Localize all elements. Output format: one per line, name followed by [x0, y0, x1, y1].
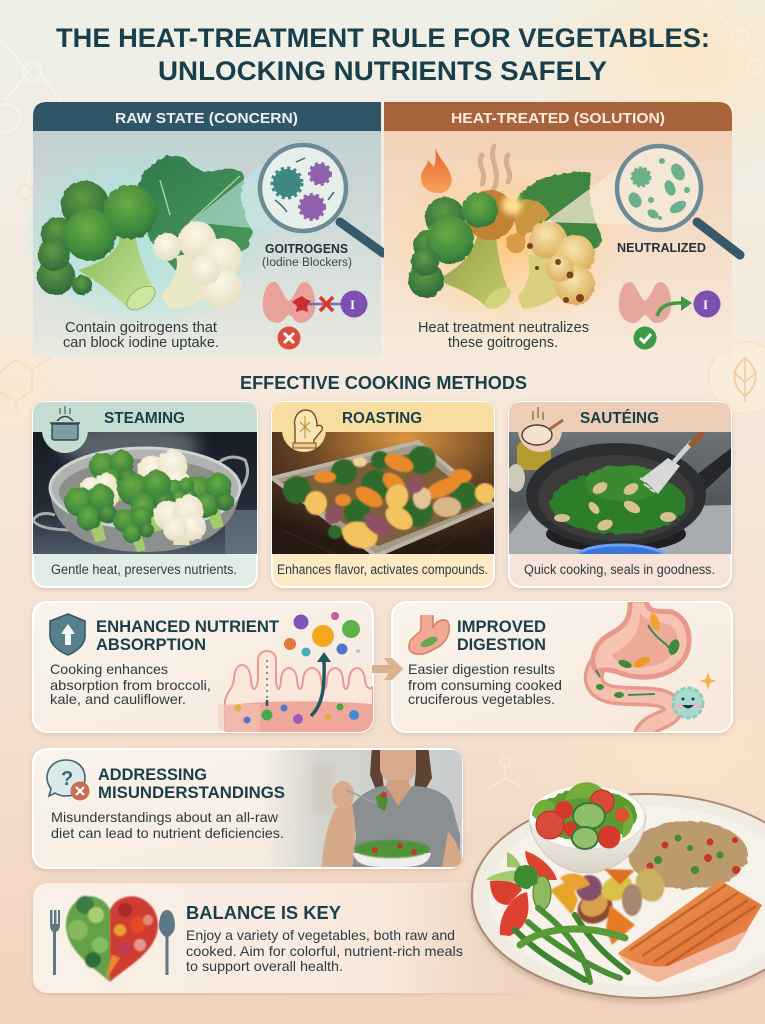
heat caption [418, 320, 589, 351]
salmon [618, 880, 762, 982]
panel: misunderstandings [33, 745, 462, 870]
goitrogens label: GOITROGENS [265, 242, 348, 256]
raw broccoli [37, 181, 159, 315]
misunderstandings text [51, 809, 284, 841]
digestion title: IMPROVED [457, 618, 546, 636]
card: roasting [272, 402, 495, 587]
raw caption: Contain goitrogens that [65, 320, 217, 336]
panel: improved digestion [392, 600, 732, 738]
digestive tract graphic [593, 600, 689, 738]
icon: fork [50, 910, 60, 975]
heat heading: HEAT-TREATED (SOLUTION) [451, 110, 665, 127]
steaming photo [33, 432, 257, 554]
icon: flame [421, 148, 452, 193]
absorption text: kale, and cauliflower. [50, 691, 186, 707]
panel: raw state [20, 102, 383, 356]
balance text [186, 927, 463, 974]
absorption text: Cooking enhances [50, 661, 168, 677]
saute photo [507, 432, 731, 554]
absorption text: absorption from broccoli, [50, 677, 211, 693]
digestion text: from consuming cooked [408, 677, 562, 693]
roasting caption: Enhances flavor, activates compounds. [277, 562, 488, 577]
icon: steam [480, 146, 510, 189]
title: THE HEAT-TREATMENT RULE FOR VEGETABLES: [56, 23, 710, 53]
balance text: to support overall health. [186, 958, 343, 974]
roasting photo [272, 432, 495, 556]
title [56, 23, 710, 86]
plate of food [471, 782, 765, 1003]
steaming title: STEAMING [104, 410, 185, 427]
vitamin balls [284, 612, 360, 656]
digestion text: Easier digestion results [408, 661, 555, 677]
saute badge icon [518, 407, 563, 452]
digestion text [408, 661, 562, 707]
thyroid blocked: I [350, 297, 355, 312]
icon: stomach [409, 615, 449, 654]
roasting badge icon [282, 408, 326, 452]
saute caption: Quick cooking, seals in goodness. [524, 562, 715, 577]
panel: nutrient absorption [33, 602, 373, 732]
goitrogens label [262, 242, 352, 269]
cooked cauliflower [506, 221, 595, 308]
heat magnifier neutralized [545, 146, 740, 255]
digestion text: cruciferous vegetables. [408, 691, 555, 707]
raw caption [63, 320, 219, 351]
cooked broccoli [408, 190, 522, 313]
panel: heat treated [380, 102, 740, 356]
misunderstandings title [98, 766, 285, 802]
panel: balance is key [33, 883, 543, 993]
digestion title: DIGESTION [457, 636, 546, 654]
misunderstandings title: ADDRESSING [98, 766, 207, 784]
cooked kale [510, 172, 602, 250]
steaming caption: Gentle heat, preserves nutrients. [51, 562, 237, 577]
raw caption: can block iodine uptake. [63, 335, 219, 351]
steaming badge icon [42, 406, 88, 453]
misunderstandings text: Misunderstandings about an all-raw [51, 809, 279, 825]
raw heading: RAW STATE (CONCERN) [115, 110, 298, 127]
balance text: cooked. Aim for colorful, nutrient-rich meals [186, 943, 463, 959]
title: UNLOCKING NUTRIENTS SAFELY [158, 56, 607, 86]
digestion title [457, 618, 546, 654]
misunderstandings title: MISUNDERSTANDINGS [98, 784, 285, 802]
absorption text [50, 661, 211, 707]
goitrogens label: (Iodine Blockers) [262, 257, 352, 269]
card: steaming [33, 402, 265, 587]
misunderstandings text: diet can lead to nutrient deficiencies. [51, 825, 284, 841]
absorption title: ENHANCED NUTRIENT [96, 618, 279, 636]
arrow: absorption to digestion [372, 658, 403, 680]
balance title: BALANCE IS KEY [186, 902, 342, 923]
heading: cooking methods: EFFECTIVE COOKING METHODS [240, 373, 527, 393]
balance text: Enjoy a variety of vegetables, both raw and [186, 927, 455, 943]
absorption title: ABSORPTION [96, 636, 206, 654]
neutralized label: NEUTRALIZED [617, 241, 706, 255]
icon: happy gut microbe [673, 672, 716, 718]
salad bowl [529, 782, 646, 873]
glow behind cooked vegetables [380, 145, 630, 335]
icon: question bubble [47, 760, 90, 800]
thyroid healthy [619, 282, 720, 350]
raw kale [135, 156, 254, 270]
raw magnifier with goitrogens [190, 145, 383, 253]
saute title: SAUTÉING [580, 410, 659, 427]
tomato and cucumber sides [486, 851, 557, 936]
quinoa [628, 821, 748, 889]
heat caption: these goitrogens. [448, 335, 558, 351]
icon: vegetable heart [66, 896, 158, 982]
thyroid blocked [263, 282, 368, 350]
icon: shield [50, 614, 85, 655]
card: sauteing [507, 402, 731, 587]
woman eating salad photo [275, 750, 462, 867]
absorption title [96, 618, 279, 654]
glow behind vegetables [20, 140, 270, 330]
roasted vegetables [550, 864, 669, 945]
villi graphic [218, 651, 373, 732]
heat caption: Heat treatment neutralizes [418, 320, 589, 336]
roasting title: ROASTING [342, 410, 422, 427]
icon: question bubble: ? [61, 768, 73, 790]
green beans [515, 908, 628, 982]
icon: spoon [159, 910, 175, 975]
raw cauliflower [153, 221, 242, 308]
thyroid healthy: I [703, 297, 708, 312]
